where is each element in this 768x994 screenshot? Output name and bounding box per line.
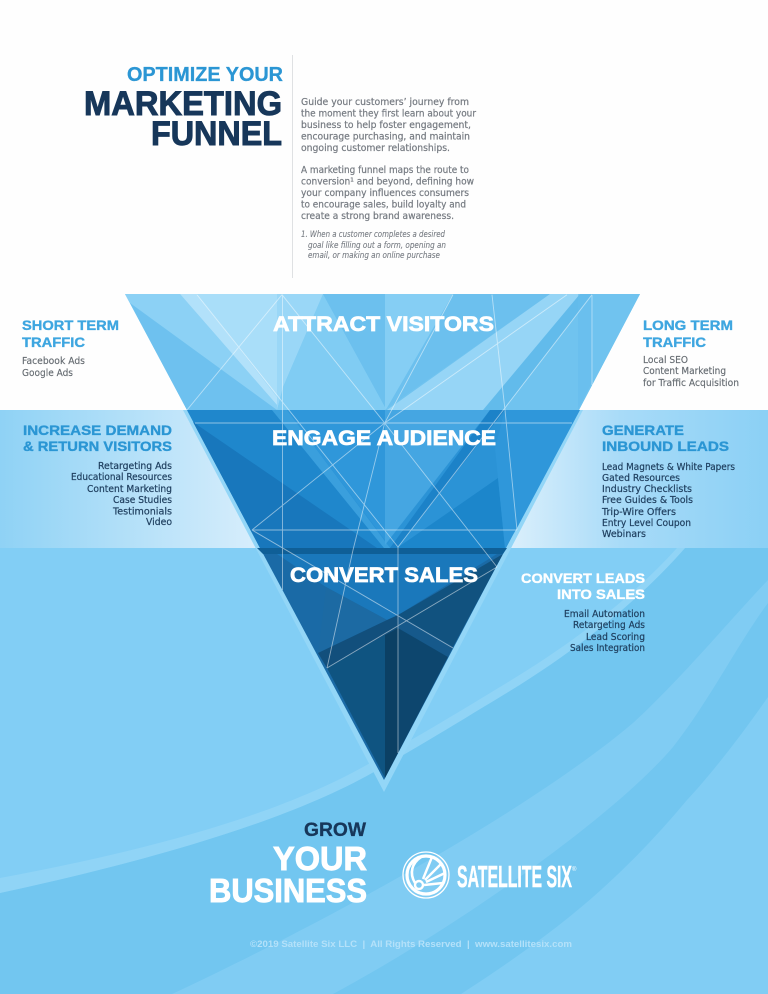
panel: short term traffic: SHORT TERM: [22, 317, 119, 333]
funnel wireframe lines: [187, 295, 592, 753]
title: MARKETING: [84, 85, 282, 123]
intro paragraph two: A marketing funnel maps the route to: [301, 165, 469, 176]
icon: satellite emblem: [403, 852, 449, 898]
intro paragraph one: encourage purchasing, and maintain: [301, 132, 470, 142]
panel: convert leads into sales: Lead Scoring: [586, 632, 645, 643]
intro paragraph one: ongoing customer relationships.: [301, 143, 450, 154]
panel: generate inbound leads: Webinars: [602, 529, 646, 540]
title: OPTIMIZE YOUR: [127, 64, 284, 86]
panel: increase demand and return visitors: Retargeting Ads: [98, 461, 172, 472]
footnote: 1. When a customer completes a desired: [301, 230, 445, 240]
panel: short term traffic: [22, 317, 119, 379]
footnote: [301, 230, 446, 261]
panel: increase demand and return visitors: Case Studies: [113, 495, 172, 506]
funnel tier: engage audience: [187, 410, 580, 548]
tier label: engage audience: ENGAGE AUDIENCE: [272, 427, 496, 450]
grow your business heading: YOUR: [273, 840, 367, 877]
panel: short term traffic: Facebook Ads: [22, 356, 85, 367]
panel: generate inbound leads: Free Guides & Tools: [602, 495, 693, 506]
panel: generate inbound leads: Industry Checklists: [602, 484, 692, 495]
panel: increase demand and return visitors: Content Marketing: [87, 484, 172, 495]
grow your business heading: GROW: [304, 820, 366, 841]
panel: convert leads into sales: [521, 570, 645, 654]
panel: increase demand and return visitors: [23, 422, 172, 528]
panel: long term traffic: TRAFFIC: [643, 334, 706, 350]
panel: generate inbound leads: Lead Magnets & White Papers: [602, 462, 735, 473]
intro paragraph two: [301, 165, 474, 222]
panel: generate inbound leads: [601, 422, 735, 540]
panel: generate inbound leads: INBOUND LEADS: [602, 438, 729, 454]
footer copyright: ©2019 Satellite Six LLC | All Rights Reserved | www.satellitesix.com: [250, 939, 572, 950]
panel: long term traffic: Local SEO: [643, 355, 688, 366]
registered mark: ®: [572, 866, 577, 873]
funnel tier: attract visitors: [125, 294, 640, 410]
panel: convert leads into sales: Email Automation: [564, 609, 645, 620]
logo wordmark: SATELLITE SIX: [457, 859, 572, 894]
title: [84, 64, 284, 153]
panel: convert leads into sales: Retargeting Ads: [573, 620, 645, 631]
intro paragraph one: Guide your customers’ journey from: [301, 97, 469, 108]
panel: short term traffic: Google Ads: [22, 368, 73, 379]
footnote: email, or making an online purchase: [308, 251, 440, 261]
panel: generate inbound leads: Entry Level Coupon: [602, 518, 691, 529]
panel: generate inbound leads: Trip-Wire Offers: [601, 507, 676, 518]
grow your business heading: [209, 820, 367, 909]
title: FUNNEL: [151, 115, 282, 153]
grow your business heading: BUSINESS: [209, 872, 367, 909]
panel: convert leads into sales: INTO SALES: [557, 586, 645, 602]
intro paragraph one: business to help foster engagement,: [301, 120, 471, 131]
funnel: [125, 294, 640, 780]
panel: long term traffic: [643, 317, 739, 389]
panel: generate inbound leads: GENERATE: [602, 422, 684, 438]
intro paragraph two: your company influences consumers: [301, 188, 469, 199]
panel: short term traffic: TRAFFIC: [22, 334, 85, 350]
panel: increase demand and return visitors: & RETURN VISITORS: [23, 438, 172, 454]
panel: long term traffic: for Traffic Acquisition: [643, 378, 739, 389]
intro paragraph one: the moment they first learn about your: [301, 108, 476, 120]
intro paragraph two: to encourage sales, build loyalty and: [301, 200, 466, 210]
funnel halo: [183, 410, 583, 792]
panel: increase demand and return visitors: Educational Resources: [71, 472, 172, 483]
panel: generate inbound leads: Gated Resources: [602, 473, 680, 484]
panel: convert leads into sales: CONVERT LEADS: [521, 570, 645, 586]
panel: long term traffic: Content Marketing: [643, 366, 726, 377]
intro paragraph one: [301, 97, 476, 154]
footnote: goal like filling out a form, opening an: [308, 241, 446, 251]
panel: increase demand and return visitors: INCREASE DEMAND: [23, 422, 172, 438]
logo: satellite six: [403, 852, 577, 898]
tier label: attract visitors: ATTRACT VISITORS: [273, 313, 494, 336]
panel: increase demand and return visitors: Video: [146, 517, 172, 528]
panel: long term traffic: LONG TERM: [643, 317, 733, 333]
panel: increase demand and return visitors: Testimonials: [112, 506, 172, 518]
intro paragraph two: conversion¹ and beyond, defining how: [301, 176, 474, 188]
intro paragraph two: create a strong brand awareness.: [301, 211, 454, 222]
tier label: convert sales: CONVERT SALES: [290, 564, 478, 587]
panel: convert leads into sales: Sales Integration: [570, 643, 645, 654]
funnel tier: convert sales: [257, 548, 507, 780]
